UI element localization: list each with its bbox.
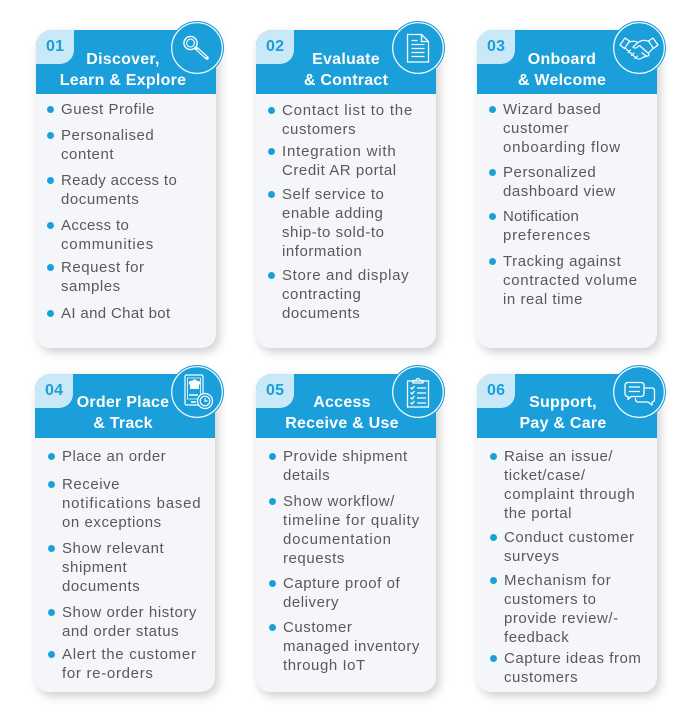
panel: 06 Support, Pay & Care [477, 374, 657, 692]
bullet: Show workflow: requests [283, 550, 345, 566]
bullet: Mechanism for customers: Mechanism for [504, 572, 611, 588]
bullet: Self service: information [282, 242, 362, 260]
heading 02: & Contract [304, 72, 388, 89]
heading 06: Pay & Care [520, 415, 606, 432]
bullet: Receive notifications [48, 476, 201, 530]
heading 01 [60, 51, 186, 89]
bullet: Alert the customer: Alert the customer [62, 646, 197, 662]
bullet: Access to communities: Access to [61, 216, 129, 234]
bullet: Integration with Credit AR portal: Credit AR portal [282, 162, 397, 178]
step number 06 [477, 374, 515, 408]
bullet: Integration with Credit AR portal [268, 142, 397, 178]
bullet: Personalised content [47, 126, 154, 162]
bullet: Contact list to the customers: Contact list to the [282, 102, 413, 118]
header band 03 [477, 30, 657, 94]
bullet: Customer managed inventory: Customer [283, 618, 352, 636]
panel: 05 Access Receive & Use [256, 374, 436, 692]
bullet: Provide shipment details: details [283, 466, 330, 484]
header band 05 [256, 374, 436, 438]
bullet: Show workflow [269, 492, 420, 566]
bullet: Tracking against [489, 252, 638, 308]
bullet: Access to communities: communities [61, 236, 154, 252]
heading 05: Receive & Use [285, 415, 399, 432]
bullet: Customer managed inventory [269, 618, 420, 674]
bullet: Mechanism for customers [490, 572, 619, 646]
bullet: Mechanism for customers: provide review/- [504, 610, 619, 626]
bullet: Wizard based: Wizard based [503, 100, 601, 118]
bullet: Capture ideas: customers [504, 668, 578, 686]
bullet: Conduct customer surveys: surveys [504, 548, 560, 564]
bullet: Alert the customer [48, 646, 197, 682]
bullet: Store and display: documents [282, 304, 360, 322]
step number 05: 05 [266, 382, 284, 399]
bullet: Raise an issue [490, 448, 635, 522]
panel: 01 Discover, Learn & Explore [36, 30, 216, 348]
heading 03: & Welcome [518, 72, 606, 89]
bullet: Provide shipment details [269, 448, 408, 484]
header band 02 [256, 30, 436, 94]
bullet: Capture ideas: Capture ideas from [504, 650, 641, 666]
bullet: Ready access to documents: Ready access to [61, 172, 177, 188]
step number 02 [256, 30, 294, 64]
bullet: Receive notifications: Receive [62, 476, 120, 492]
step number 04: 04 [45, 382, 63, 399]
bullet: Personalized dashboard view: Personalized [503, 164, 596, 180]
bullet: Access to communities [47, 216, 154, 252]
panel: 04 Order Place & Track [35, 374, 215, 692]
bullet: AI and Chat bot: AI and Chat bot [61, 304, 170, 322]
bullet: Raise an issue: Raise an issue/ [504, 448, 613, 464]
step number 06: 06 [487, 382, 505, 399]
bullet: Show workflow: Show workflow/ [283, 492, 395, 510]
heading 04: Order Place [77, 394, 169, 411]
heading 01: Discover, [86, 51, 160, 68]
bullet: Mechanism for customers: feedback [504, 628, 569, 646]
bullet: Request for samples [47, 258, 145, 294]
bullet: Ready access to documents: documents [61, 190, 139, 208]
bullet: Store and display: Store and display [282, 266, 409, 284]
heading 03: Onboard [528, 51, 596, 68]
bullet: Provide shipment details: Provide shipment [283, 448, 408, 464]
bullet: Conduct customer surveys: Conduct customer [504, 528, 635, 546]
bullet: Raise an issue: the portal [504, 504, 572, 522]
bullet: Capture proof of delivery: delivery [283, 594, 339, 610]
step number 01: 01 [46, 38, 64, 55]
bullet: Request for samples: samples [61, 278, 121, 294]
heading 05 [285, 394, 399, 432]
bullet: Tracking against: contracted volume [503, 272, 638, 288]
heading 05: Access [313, 394, 371, 411]
step number 03: 03 [487, 38, 505, 55]
bullet: Customer managed inventory: managed inventory [283, 638, 420, 654]
bullet: Receive notifications: notifications based [62, 494, 201, 512]
bullet: Personalized dashboard view [489, 164, 616, 200]
step number 03 [477, 30, 515, 64]
bullet: Show order history: and order status [62, 622, 179, 640]
bullet: Raise an issue: ticket/case/ [504, 466, 586, 484]
bullet: Show order history: Show order history [62, 604, 197, 620]
bullet: Self service [268, 186, 384, 260]
heading 06 [520, 394, 606, 432]
bullet: Contact list to the customers [268, 102, 413, 138]
icon: mobile order with clock [170, 365, 224, 419]
bullet: Tracking against: in real time [503, 290, 583, 308]
bullet: Self service: ship-to sold-to [282, 224, 384, 240]
bullet: Wizard based: onboarding flow [503, 138, 621, 156]
heading 02: Evaluate [312, 51, 380, 68]
header band 06 [477, 374, 657, 438]
icon: document [391, 21, 445, 75]
header band 04 [35, 374, 215, 438]
step number 05 [256, 374, 294, 408]
bullet: Ready access to documents [47, 172, 177, 208]
icon: chat bubbles [612, 365, 666, 419]
heading 01: Learn & Explore [60, 72, 186, 89]
bullet: Place an order: Place an order [62, 448, 166, 464]
bullet: Wizard based [489, 100, 621, 156]
heading 04: & Track [93, 415, 153, 432]
heading 03 [518, 51, 606, 89]
bullet: Wizard based: customer [503, 120, 569, 136]
bullet: Conduct customer surveys [490, 528, 635, 564]
heading 04 [77, 394, 169, 432]
bullet: Store and display: contracting [282, 286, 361, 302]
bullet: Receive notifications: on exceptions [62, 514, 162, 530]
bullet: Show order history [48, 604, 197, 640]
bullet: Self service: enable adding [282, 204, 383, 222]
bullet: Personalised content: content [61, 146, 114, 162]
bullet: Show relevant: shipment [62, 558, 127, 576]
bullet: Show workflow: timeline for quality [283, 512, 420, 528]
bullet: Capture ideas [490, 650, 641, 686]
step number 02: 02 [266, 38, 284, 55]
bullet: Notification preferences: preferences [503, 226, 591, 244]
icon: handshake [612, 21, 666, 75]
bullet: Customer managed inventory: through IoT [283, 656, 366, 674]
heading 06: Support, [529, 394, 597, 411]
heading 02 [304, 51, 388, 89]
icon: magnifying glass [170, 21, 224, 75]
bullet: Notification preferences: Notification [503, 208, 579, 224]
bullet: Contact list to the customers: customers [282, 120, 356, 138]
panel: 03 Onboard & Welcome [477, 30, 657, 348]
bullet: Alert the customer: for re-orders [62, 664, 154, 682]
panel: 02 Evaluate & Contract [256, 30, 436, 348]
bullet: Raise an issue: complaint through [504, 486, 635, 502]
bullet: Self service: Self service to [282, 186, 384, 202]
bullet: Show relevant: documents [62, 578, 140, 594]
bullet: Capture proof of delivery [269, 574, 400, 610]
bullet: Personalised content: Personalised [61, 126, 154, 144]
bullet: Mechanism for customers: customers to [504, 590, 596, 608]
bullet: Store and display [268, 266, 409, 322]
bullet: Capture proof of delivery: Capture proof of [283, 574, 400, 592]
bullet: Show workflow: documentation [283, 530, 392, 548]
bullet: Guest Profile: Guest Profile [61, 100, 155, 118]
bullet: Show relevant: Show relevant [62, 540, 164, 556]
bullet: Request for samples: Request for [61, 258, 145, 276]
icon: clipboard checklist [391, 365, 445, 419]
bullet: Show relevant [48, 540, 164, 594]
bullet: Integration with Credit AR portal: Integration with [282, 142, 397, 160]
bullet: Personalized dashboard view: dashboard view [503, 182, 616, 200]
step number 01 [36, 30, 74, 64]
bullet: Tracking against: Tracking against [503, 252, 621, 270]
header band 01 [36, 30, 216, 94]
bullet: Notification preferences [489, 208, 591, 244]
step number 04 [35, 374, 73, 408]
